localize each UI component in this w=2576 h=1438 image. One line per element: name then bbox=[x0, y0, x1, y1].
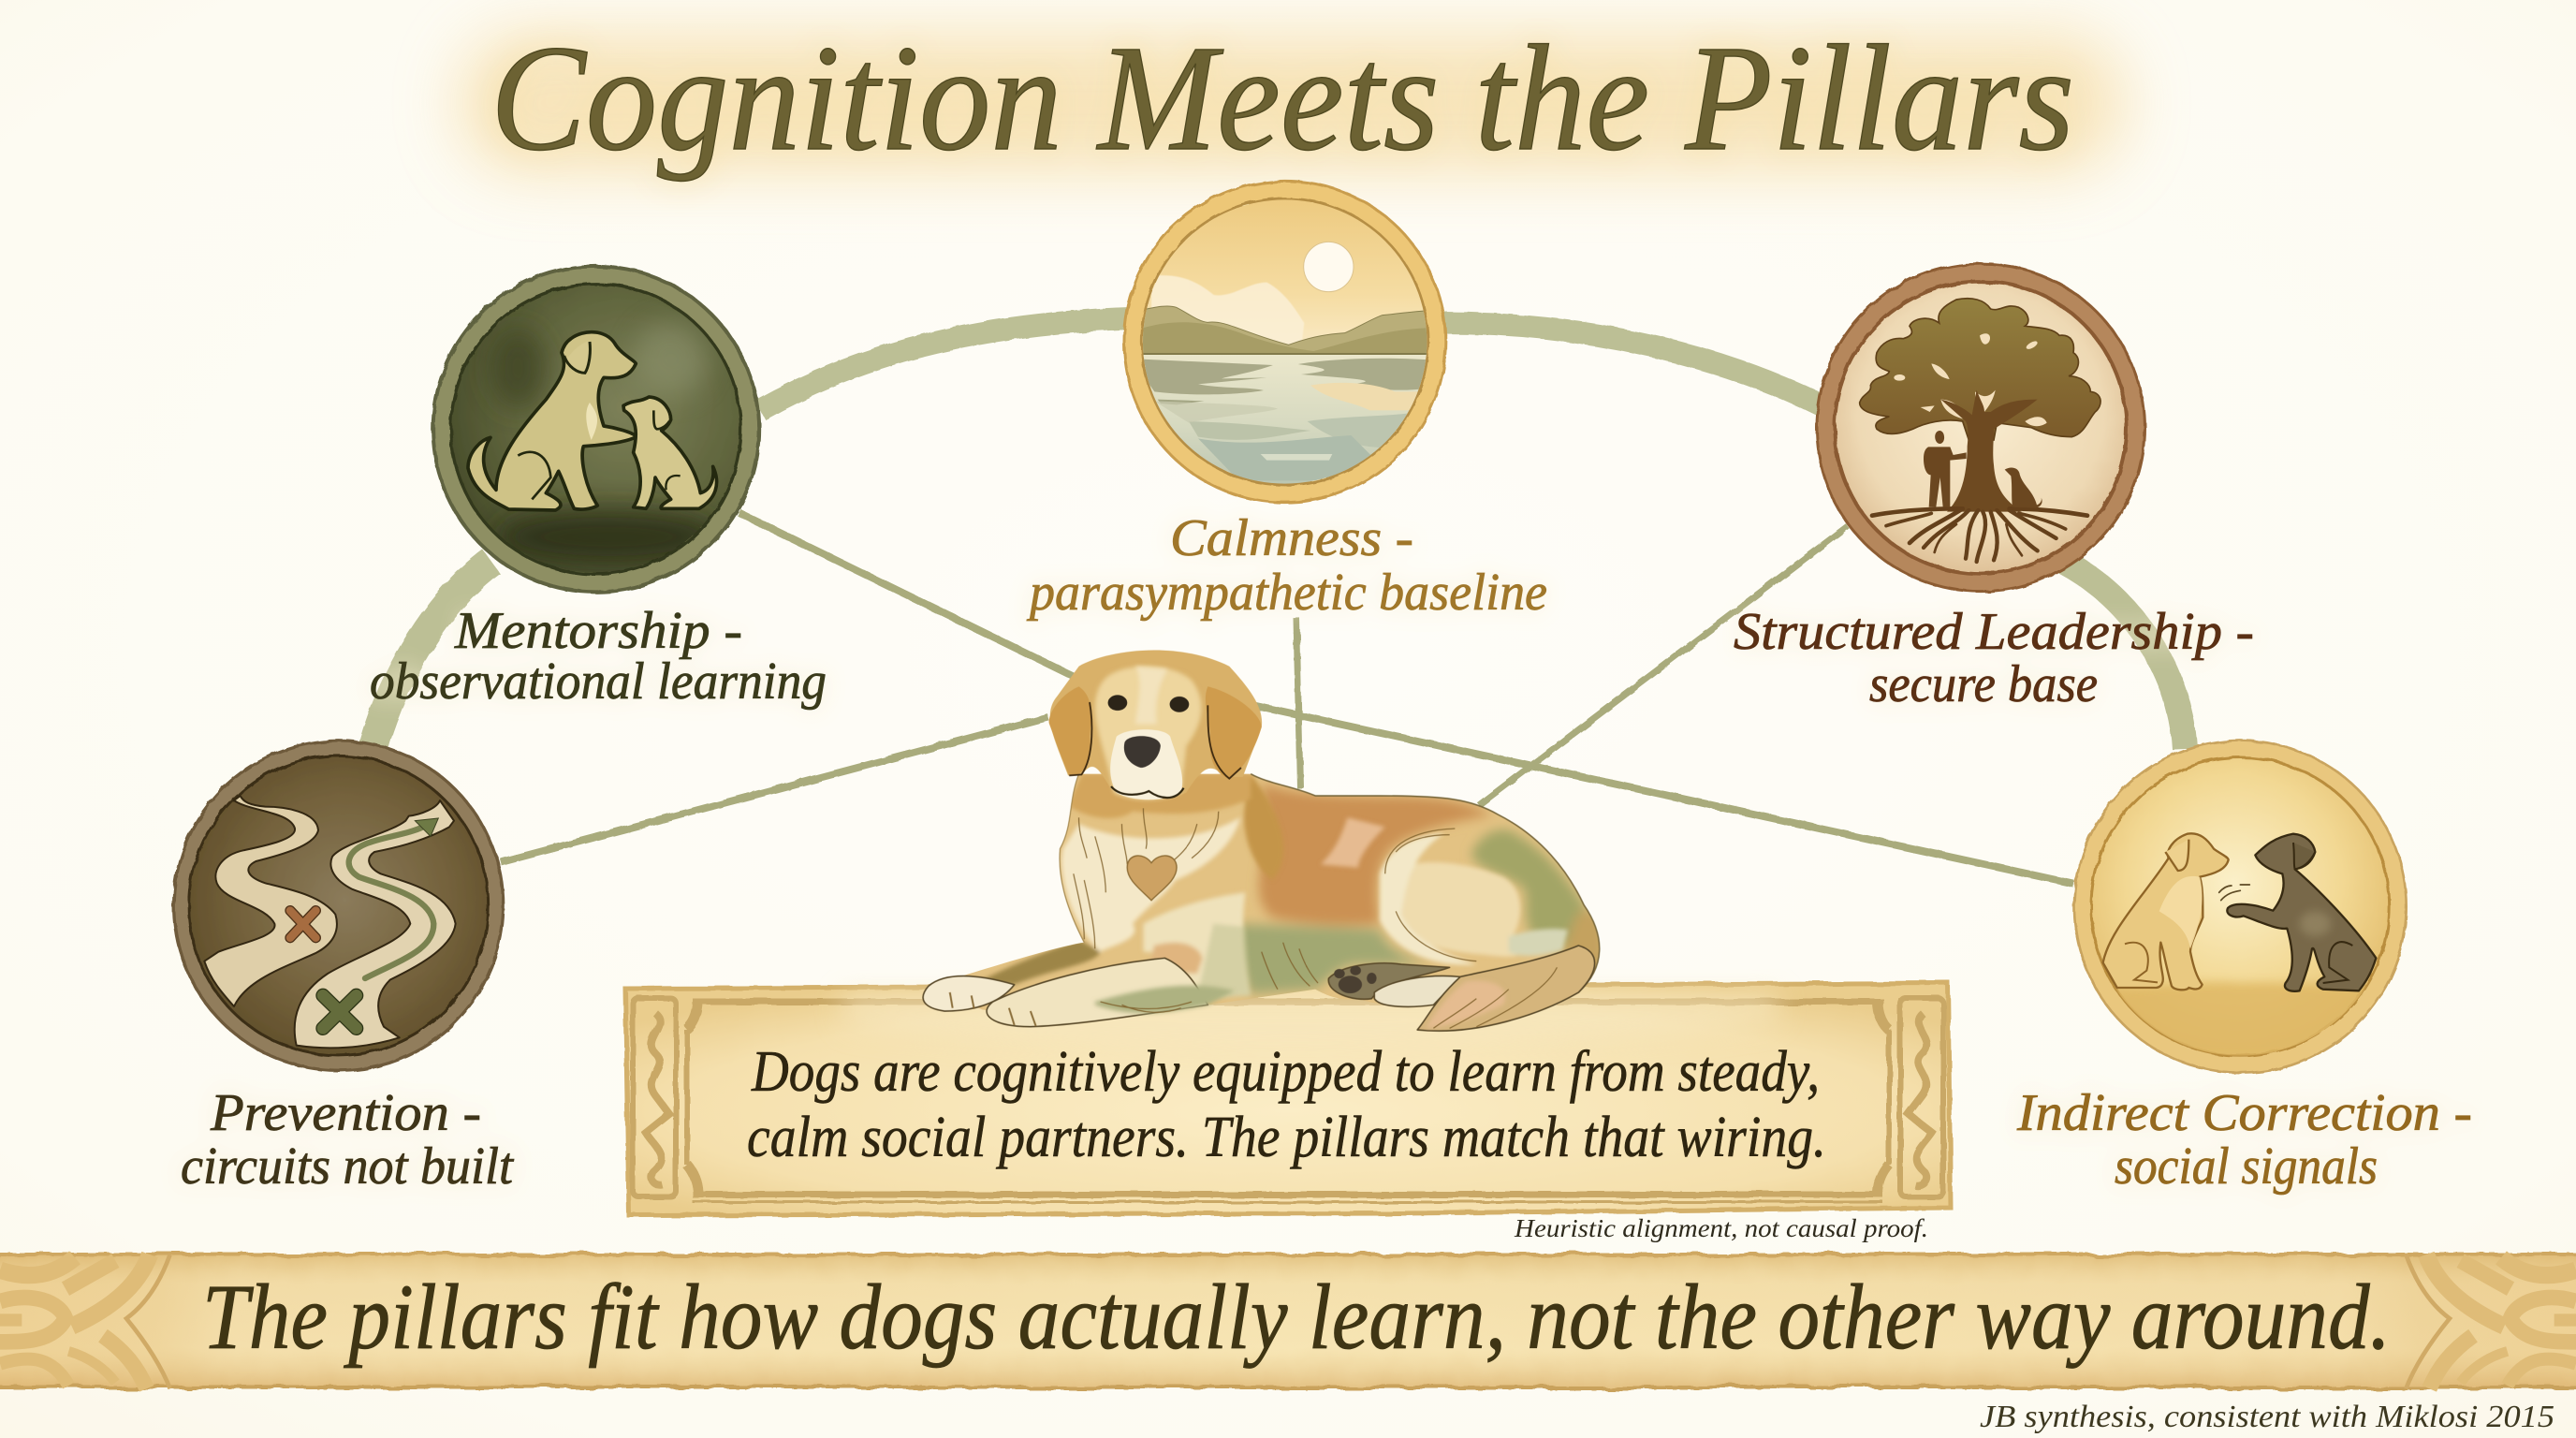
icon: open winding path bbox=[295, 800, 456, 1048]
icon: mountains bbox=[1139, 306, 1432, 355]
dog legs and paws bbox=[923, 946, 1595, 1031]
medallion: structured leadership bbox=[1817, 264, 2144, 592]
banner ornament right bbox=[2406, 1255, 2576, 1388]
icon: small dog bbox=[2005, 467, 2042, 508]
icon: blocked winding path bbox=[204, 796, 337, 1006]
footnote: heuristic alignment: Heuristic alignment, not causal proof. bbox=[1514, 1214, 1928, 1242]
credit line: JB synthesis, consistent with Miklosi 2015 bbox=[1980, 1400, 2554, 1434]
panel body text: calm social partners. The pillars match that wiring. bbox=[747, 1106, 1826, 1169]
medallion: mentorship bbox=[433, 266, 759, 592]
icon: green route arrow bbox=[349, 826, 433, 978]
icon: light dog bbox=[2103, 833, 2229, 990]
icon: motion strokes bbox=[2219, 885, 2249, 901]
label: structured leadership: secure base bbox=[1869, 655, 2098, 713]
central golden retriever bbox=[922, 650, 1601, 1032]
icon: person bbox=[1924, 431, 1967, 507]
title glow bbox=[459, 33, 2125, 173]
icon: sun bbox=[1304, 242, 1354, 292]
label: prevention bbox=[181, 1084, 514, 1196]
label: calmness: Calmness - bbox=[1170, 509, 1413, 567]
banner: closing statement bbox=[0, 1255, 2576, 1388]
icon: adult dog bbox=[468, 332, 637, 510]
label: mentorship: Mentorship - bbox=[454, 602, 742, 660]
connector lines to dog bbox=[501, 513, 2073, 884]
title: Cognition Meets the Pillars bbox=[490, 15, 2074, 183]
panel body text: Dogs are cognitively equipped to learn from steady, bbox=[751, 1040, 1820, 1104]
icon: tree canopy bbox=[1860, 299, 2100, 440]
panel: summary plaque bbox=[625, 983, 1951, 1215]
label: structured leadership bbox=[1734, 603, 2254, 713]
label: indirect correction: social signals bbox=[2115, 1137, 2378, 1196]
banner ornament left bbox=[0, 1255, 170, 1388]
icon: tree trunk bbox=[1940, 390, 2038, 512]
medallion: prevention bbox=[174, 741, 504, 1070]
label: structured leadership: Structured Leadership - bbox=[1734, 603, 2254, 661]
dog tail bbox=[1417, 946, 1595, 1031]
label: indirect correction bbox=[2016, 1084, 2472, 1196]
dog head bbox=[1049, 651, 1262, 800]
icon: roots bbox=[1872, 508, 2087, 562]
label: calmness bbox=[1026, 509, 1547, 622]
medallion: calmness bbox=[1124, 181, 1445, 503]
label: mentorship: observational learning bbox=[370, 653, 827, 711]
arc: pillars connecting band bbox=[373, 318, 2185, 749]
icon: canopy gaps bbox=[1894, 333, 2047, 426]
panel body text bbox=[747, 1040, 1826, 1169]
icon: brown cross bbox=[290, 911, 315, 938]
label: prevention: Prevention - bbox=[210, 1084, 481, 1142]
fur strokes bbox=[950, 808, 1557, 1028]
label: indirect correction: Indirect Correction - bbox=[2016, 1084, 2472, 1142]
icon: heart on chest bbox=[1127, 856, 1177, 901]
label: calmness: parasympathetic baseline bbox=[1026, 564, 1547, 622]
icon: lake bbox=[1144, 355, 1427, 484]
icon: dark dog raising paw bbox=[2227, 834, 2376, 991]
label: mentorship bbox=[370, 602, 827, 711]
icon: green cross bbox=[323, 995, 357, 1028]
dog body washes bbox=[964, 773, 1599, 1010]
dog silhouette outline bbox=[1251, 774, 1600, 992]
label: prevention: circuits not built bbox=[181, 1137, 514, 1196]
icon: puppy bbox=[623, 397, 717, 508]
medallion: indirect correction bbox=[2074, 741, 2407, 1073]
